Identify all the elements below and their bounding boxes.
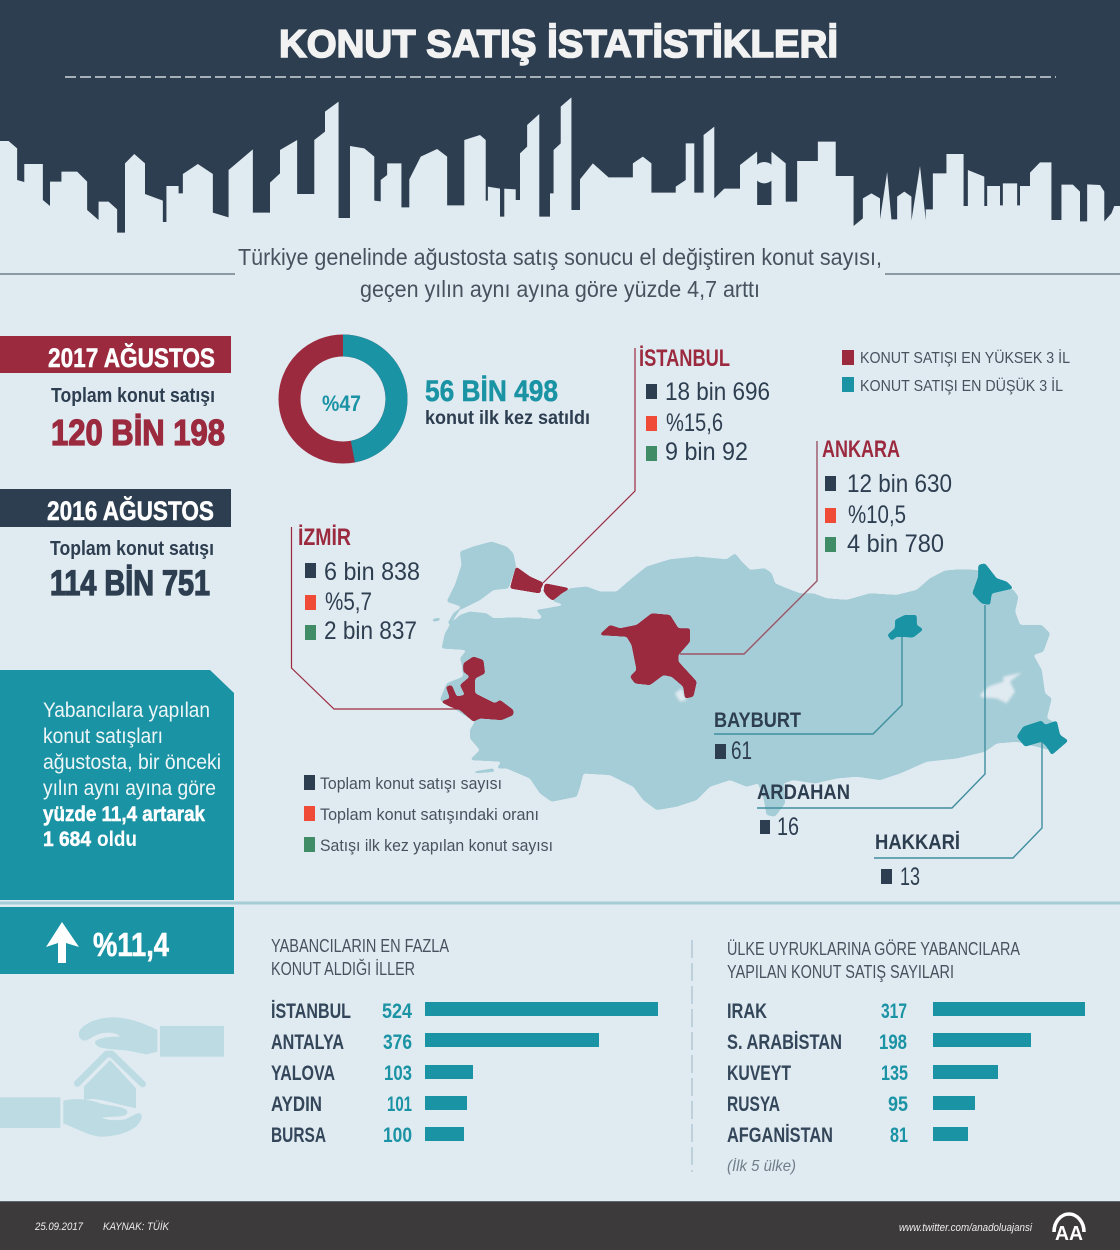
panel: foreign sales: konut satışları [43,725,163,748]
bar chart: nationalities: 198 [879,1031,907,1054]
bar chart: nationalities: 95 [888,1093,908,1116]
label: Hakkari: HAKKARİ [875,831,960,854]
intro text: geçen yılın aynı ayına göre yüzde 4,7 arttı [360,276,760,302]
bar chart: provinces: ANTALYA [271,1031,344,1054]
panel: foreign sales [0,670,234,900]
icon: up arrow [46,922,79,963]
label: Ankara: ANKARA [822,436,900,463]
label: Ankara: 12 bin 630 [847,470,952,498]
icon: hands protecting house [0,1017,224,1137]
bar chart: provinces: 101 [387,1093,412,1116]
label: İzmir: %5,7 [325,588,372,616]
bar chart: nationalities: (İlk 5 ülke) [727,1156,796,1175]
panel: 2016 total: Toplam konut satışı [50,538,214,560]
map: low-sale provinces [887,563,1068,755]
map legend: Toplam konut satışı sayısı [320,774,502,793]
donut chart [290,346,396,452]
bar chart: provinces: YALOVA [271,1062,335,1085]
bar chart: nationalities: KUVEYT [727,1062,791,1085]
bar chart: nationalities: YAPILAN KONUT SATIŞ SAYILARI [727,962,954,982]
panel: 2017 total: Toplam konut satışı [51,385,215,407]
bar chart: provinces: BURSA [271,1124,326,1147]
icon: agency logo [1054,1214,1084,1245]
bar chart: provinces: 376 [383,1031,412,1054]
bar chart: nationalities: 135 [881,1062,908,1085]
bar chart: nationalities [727,939,1085,1175]
panel: 2017 total: 2017 AĞUSTOS [48,342,215,373]
arrow: İzmir leader line [292,527,458,709]
panel: foreign sales: yüzde 11,4 artarak [43,803,205,826]
arrow: İstanbul leader line [543,348,635,583]
footer bar: www.twitter.com/anadoluajansi [899,1222,1032,1234]
label: İzmir: İZMİR [298,524,351,551]
panel: 2017 total [0,336,231,453]
intro text [0,244,1120,302]
label: İzmir: 6 bin 838 [324,558,420,586]
bar chart: nationalities: 317 [881,1000,907,1023]
arrow: Ankara leader line [680,441,817,654]
label: İzmir: 2 bin 837 [324,617,417,645]
label: Ardahan [757,781,850,841]
map: high-sale provinces [441,567,697,722]
panel: 2017 total: 120 BİN 198 [51,412,225,453]
bar chart: nationalities: RUSYA [727,1093,780,1116]
icon: agency logo: AA [1055,1223,1083,1245]
label: İstanbul: %15,6 [666,409,723,437]
label: İstanbul: 18 bin 696 [665,378,770,406]
bar chart: nationalities: ÜLKE UYRUKLARINA GÖRE YABANCILARA [727,939,1020,959]
bar chart: nationalities: S. ARABİSTAN [727,1031,842,1054]
legend: highest and lowest provinces: KONUT SATIŞI EN YÜKSEK 3 İL [860,348,1070,367]
label: Hakkari [875,831,960,891]
bar chart: provinces: 100 [383,1124,412,1147]
bar chart: provinces: 103 [384,1062,412,1085]
legend: highest and lowest provinces: KONUT SATIŞI EN DÜŞÜK 3 İL [860,376,1063,395]
label: Bayburt [714,709,801,765]
bar chart: provinces [271,936,658,1147]
label: Ankara: %10,5 [848,501,906,529]
header banner with skyline [0,0,1120,243]
bar chart: provinces: İSTANBUL [271,1000,351,1023]
label: İstanbul: İSTANBUL [639,345,730,372]
donut chart: %47 [322,391,361,416]
label: Ardahan: ARDAHAN [757,781,850,804]
footer bar: KAYNAK: TÜİK [103,1221,170,1233]
label: Hakkari: 13 [900,863,920,891]
panel: foreign sales: Yabancılara yapılan [43,699,210,722]
panel: increase percentage: %11,4 [93,926,170,963]
arrow: Ardahan leader line [757,605,985,808]
arrow: Hakkari leader line [874,742,1042,858]
footer bar: 25.09.2017 [34,1221,84,1233]
arrow: Bayburt leader line [714,637,902,734]
legend: highest and lowest provinces [842,348,1070,395]
bar chart: nationalities: IRAK [727,1000,767,1023]
label: İstanbul: 9 bin 92 [665,438,748,466]
intro text: Türkiye genelinde ağustosta satış sonucu el değiştiren konut sayısı, [238,244,882,270]
label: Ankara [822,436,952,558]
bar chart: provinces: YABANCILARIN EN FAZLA [271,936,449,956]
label: Ardahan: 16 [777,813,799,841]
map legend [304,774,553,855]
label: Bayburt: BAYBURT [714,709,801,732]
first-sale callout: konut ilk kez satıldı [425,408,590,429]
footer bar [0,1201,1120,1250]
panel: 2016 total: 114 BİN 751 [50,564,210,603]
first-sale callout [425,375,590,429]
panel: increase percentage [0,907,234,974]
first-sale callout: 56 BİN 498 [425,375,558,408]
title: KONUT SATIŞ İSTATİSTİKLERİ [279,23,838,66]
label: İzmir [298,524,420,645]
bar chart: provinces: KONUT ALDIĞI İLLER [271,958,415,979]
panel: foreign sales: oldu [97,828,137,851]
panel: 2016 total [0,489,231,603]
label: İstanbul [639,345,770,466]
bar chart: provinces: 524 [382,1000,412,1023]
panel: foreign sales: ağustosta, bir önceki [43,751,221,774]
bar chart: nationalities: 81 [890,1124,908,1147]
panel: foreign sales: 1 684 [43,828,91,851]
map legend: Toplam konut satışındaki oranı [320,805,539,824]
panel: 2016 total: 2016 AĞUSTOS [47,495,214,526]
map of Turkey [432,542,1053,817]
label: Ankara: 4 bin 780 [847,530,944,558]
bar chart: nationalities: AFGANİSTAN [727,1124,833,1147]
panel: foreign sales: yılın aynı ayına göre [43,777,216,800]
label: Bayburt: 61 [731,737,752,765]
map legend: Satışı ilk kez yapılan konut sayısı [320,836,553,855]
bar chart: provinces: AYDIN [271,1093,322,1116]
